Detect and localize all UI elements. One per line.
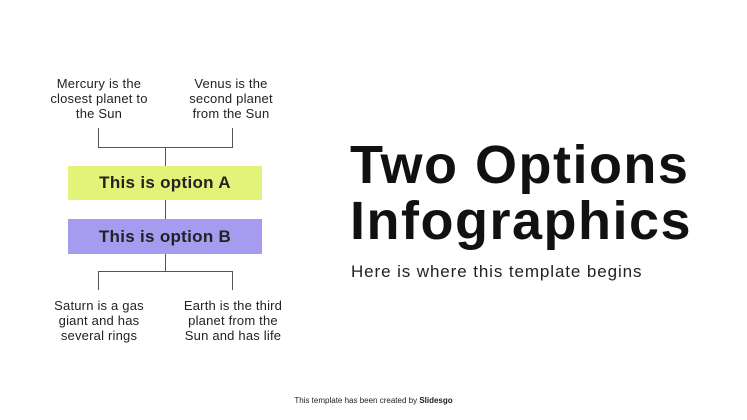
text: venus: Venus is the — [194, 76, 268, 91]
text: venus — [189, 76, 273, 121]
text: saturn: giant and has — [59, 313, 139, 328]
text: saturn: Saturn is a gas — [54, 298, 144, 313]
connector: top bracket — [98, 128, 233, 219]
title — [350, 135, 692, 251]
text: mercury: closest planet to — [50, 91, 148, 106]
text: venus: from the Sun — [193, 106, 269, 121]
text: mercury — [50, 76, 148, 121]
option B box: This is option B — [99, 227, 231, 246]
title: Two Options — [350, 135, 689, 195]
subtitle: Here is where this template begins — [351, 262, 642, 281]
text: earth: Earth is the third — [184, 298, 282, 313]
text: earth: Sun and has life — [185, 328, 281, 343]
text: mercury: Mercury is the — [57, 76, 141, 91]
text: earth — [184, 298, 282, 343]
connector: bottom bracket — [98, 271, 233, 290]
option A box: This is option A — [99, 173, 231, 192]
text: mercury: the Sun — [76, 106, 122, 121]
text: venus: second planet — [189, 91, 273, 106]
title: Infographics — [350, 191, 692, 251]
option B box — [68, 219, 262, 254]
text: earth: planet from the — [188, 313, 278, 328]
option A box — [68, 166, 262, 200]
footer: This template has been created by Slidesgo — [294, 396, 453, 405]
text: saturn — [54, 298, 144, 343]
text: saturn: several rings — [61, 328, 137, 343]
